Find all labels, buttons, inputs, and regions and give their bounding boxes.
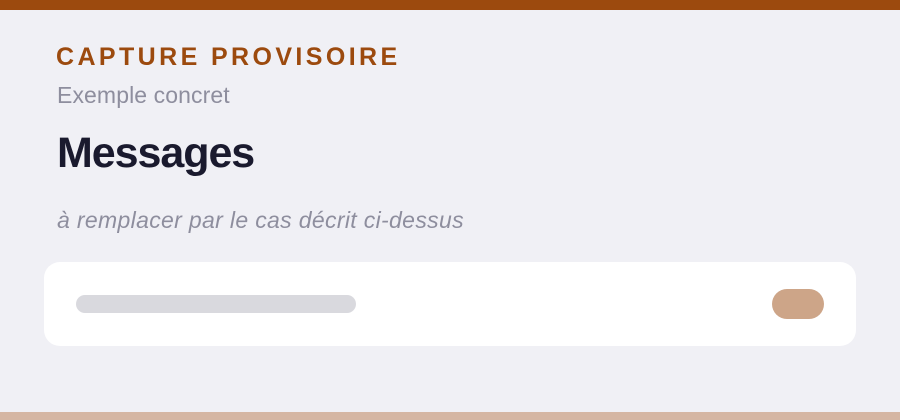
bottom accent bar xyxy=(0,412,900,420)
placeholder text line xyxy=(76,295,356,313)
italic note: à remplacer par le cas décrit ci-dessus xyxy=(57,207,464,233)
main title: Messages xyxy=(57,129,254,177)
subtitle: Exemple concret xyxy=(57,82,230,108)
eyebrow heading: CAPTURE PROVISOIRE xyxy=(56,43,401,71)
send button xyxy=(772,289,824,319)
top accent bar xyxy=(0,0,900,10)
message input card xyxy=(44,262,856,346)
